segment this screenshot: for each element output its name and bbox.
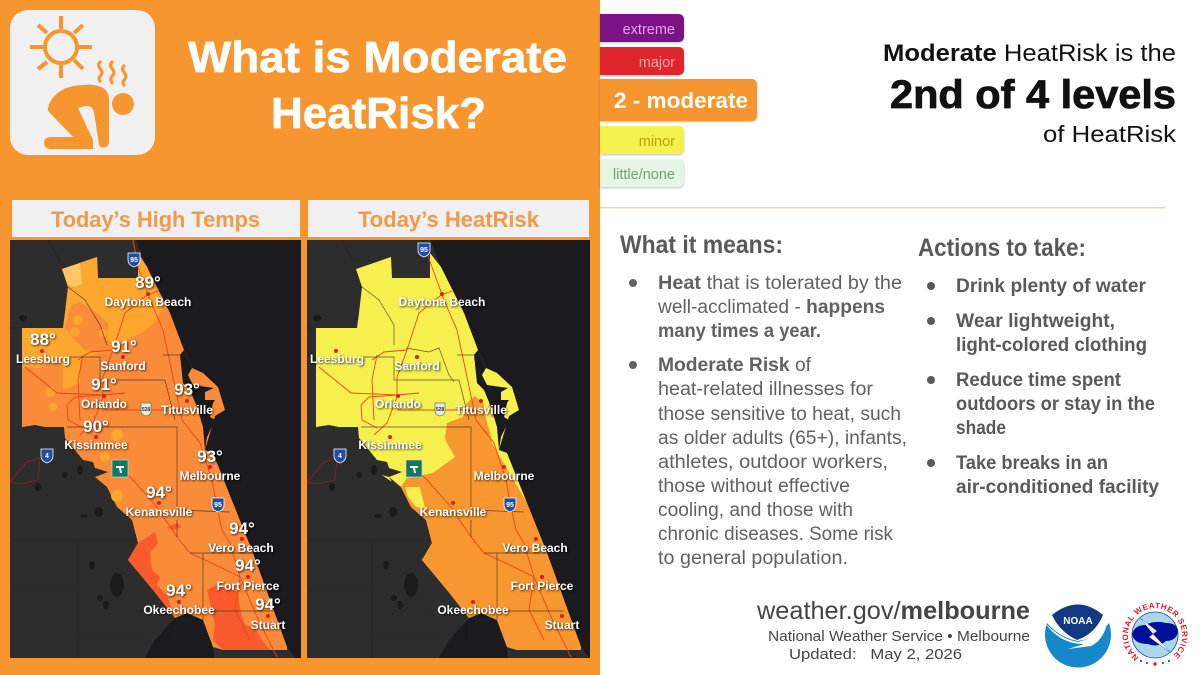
city labels: Titusville bbox=[455, 403, 507, 417]
I-4 shield bbox=[334, 449, 346, 463]
text block: Actions to take: Drink plenty of water bbox=[956, 275, 1146, 297]
level heading: of HeatRisk bbox=[1043, 121, 1177, 147]
title: What is Moderate bbox=[188, 33, 567, 82]
I-95 shield, south: 95 bbox=[506, 502, 514, 509]
level: major: major bbox=[639, 55, 675, 71]
city and temperature labels: 90° bbox=[83, 417, 109, 436]
level heading: Moderate HeatRisk is the bbox=[883, 40, 1176, 67]
city and temperature labels: 94° bbox=[146, 483, 172, 502]
city and temperature labels: 94° bbox=[166, 581, 192, 600]
text block: What it means: heat-related illnesses for bbox=[658, 379, 874, 400]
I-95 shield, north bbox=[418, 243, 430, 257]
city labels: Daytona Beach bbox=[399, 295, 485, 309]
level: little/none bbox=[600, 159, 684, 187]
text block: What it means: Moderate Risk of bbox=[658, 355, 812, 376]
text block: Actions to take: Take breaks in an bbox=[956, 452, 1108, 474]
I-95 shield, north bbox=[128, 253, 140, 267]
I-95 shield, north: 95 bbox=[420, 247, 428, 254]
city and temperature labels: Titusville bbox=[161, 403, 213, 417]
text block: What it means: many times a year. bbox=[658, 321, 821, 342]
text block: Actions to take: Actions to take: bbox=[918, 234, 1086, 262]
level: 2 - moderate: 2 - moderate bbox=[614, 88, 748, 113]
text block: What it means: as older adults (65+), infants, bbox=[658, 428, 907, 449]
city and temperature labels: Daytona Beach bbox=[105, 295, 191, 309]
city and temperature labels: Orlando bbox=[81, 397, 127, 411]
text block: What it means: chronic diseases. Some risk bbox=[658, 524, 893, 545]
text block: Actions to take: Wear lightweight, bbox=[956, 310, 1115, 332]
level: major bbox=[600, 47, 684, 75]
city and temperature labels: 88° bbox=[30, 330, 56, 349]
footer: website and office: Updated: May 2, 2026 bbox=[789, 646, 962, 663]
city and temperature labels: Sanford bbox=[100, 359, 146, 373]
city and temperature labels: Kissimmee bbox=[64, 438, 128, 452]
I-95 shield, north: 95 bbox=[130, 257, 138, 264]
city labels: Okeechobee bbox=[437, 603, 509, 617]
text block: Actions to take: air-conditioned facility bbox=[956, 476, 1159, 498]
level: little/none: little/none bbox=[613, 167, 675, 183]
city labels: Melbourne bbox=[474, 469, 535, 483]
text block: Actions to take bbox=[918, 234, 1159, 498]
text block: What it means bbox=[620, 231, 907, 569]
footer: website and office: weather.gov/melbourne bbox=[756, 597, 1030, 625]
icon: NOAA logo bbox=[1045, 598, 1111, 668]
level: extreme: extreme bbox=[623, 22, 675, 38]
city and temperature labels: 91° bbox=[91, 375, 117, 394]
city labels: Stuart bbox=[545, 618, 579, 632]
city and temperature labels: 93° bbox=[197, 447, 223, 466]
text block: What it means: cooling, and those with bbox=[658, 500, 853, 521]
I-95 shield, south bbox=[504, 498, 516, 512]
text block: What it means: What it means: bbox=[620, 231, 783, 259]
city and temperature labels: 94° bbox=[235, 556, 261, 575]
text block: What it means: those without effective bbox=[658, 476, 850, 497]
I-95 shield, south: 95 bbox=[214, 502, 222, 509]
level: minor bbox=[600, 126, 684, 154]
level heading: 2nd of 4 levels bbox=[890, 73, 1176, 117]
city and temperature labels: 93° bbox=[174, 380, 200, 399]
icon: NOAA logo: NOAA bbox=[1063, 616, 1093, 627]
text block: What it means: athletes, outdoor workers, bbox=[658, 452, 888, 473]
I-4 shield bbox=[41, 449, 53, 463]
text block: Actions to take: light-colored clothing bbox=[956, 334, 1147, 356]
level heading bbox=[883, 40, 1177, 147]
city and temperature labels: 91° bbox=[111, 337, 137, 356]
city and temperature labels: Melbourne bbox=[180, 469, 241, 483]
city labels: Kenansville bbox=[420, 505, 487, 519]
footer: website and office bbox=[756, 597, 1030, 663]
city and temperature labels: 89° bbox=[135, 273, 161, 292]
city labels: Sanford bbox=[394, 359, 440, 373]
text block: What it means: those sensitive to heat, such bbox=[658, 404, 901, 425]
city and temperature labels: Okeechobee bbox=[143, 603, 215, 617]
text block: Actions to take: Reduce time spent bbox=[956, 369, 1121, 391]
city labels: Orlando bbox=[375, 397, 421, 411]
Beachline shield: 528 bbox=[142, 407, 150, 413]
text block: Actions to take: outdoors or stay in the bbox=[956, 393, 1155, 415]
map: HeatRisk levels bbox=[304, 240, 595, 658]
panel heading: Today's High Temps bbox=[12, 200, 300, 237]
city and temperature labels: Kenansville bbox=[126, 505, 193, 519]
icon: person overheating under the sun bbox=[10, 10, 155, 155]
I-4 shield: 4 bbox=[45, 453, 49, 460]
text block: What it means: well-acclimated - happens bbox=[657, 297, 885, 318]
city and temperature labels: Vero Beach bbox=[208, 541, 274, 555]
city and temperature labels: Fort Pierce bbox=[217, 579, 280, 593]
title bbox=[188, 33, 567, 138]
city and temperature labels: Leesburg bbox=[16, 352, 70, 366]
title: HeatRisk? bbox=[271, 89, 486, 138]
map: high temperatures bbox=[10, 240, 301, 658]
text block: What it means: Heat that is tolerated by the bbox=[658, 273, 902, 294]
text block: Actions to take: shade bbox=[956, 417, 1006, 439]
city labels: Kissimmee bbox=[358, 438, 422, 452]
city and temperature labels: 94° bbox=[229, 519, 255, 538]
panel heading: Today's HeatRisk bbox=[308, 200, 589, 237]
city labels: Fort Pierce bbox=[511, 579, 574, 593]
city labels: Leesburg bbox=[310, 352, 364, 366]
I-95 shield, south bbox=[212, 498, 224, 512]
left orange panel bbox=[0, 0, 600, 675]
city and temperature labels: Stuart bbox=[251, 618, 285, 632]
level: minor: minor bbox=[639, 134, 675, 150]
city labels bbox=[310, 295, 579, 632]
Beachline shield: 528 bbox=[436, 407, 444, 413]
I-4 shield: 4 bbox=[338, 453, 342, 460]
HeatRisk level scale bbox=[600, 14, 757, 187]
panel heading: Today's HeatRisk: Today’s HeatRisk bbox=[358, 207, 540, 232]
footer: website and office: National Weather Service • Melbourne bbox=[768, 628, 1030, 645]
Beachline shield bbox=[141, 403, 151, 416]
Beachline shield bbox=[435, 403, 445, 416]
text block: What it means: to general population. bbox=[658, 548, 848, 569]
level: extreme bbox=[600, 14, 684, 42]
panel heading: Today's High Temps: Today’s High Temps bbox=[51, 207, 260, 232]
icon: National Weather Service logo: NATIONAL WEATHER SERVICE bbox=[1122, 602, 1188, 661]
Florida Turnpike sign bbox=[112, 460, 128, 477]
city and temperature labels bbox=[16, 273, 285, 632]
city and temperature labels: 94° bbox=[255, 595, 281, 614]
city labels: Vero Beach bbox=[502, 541, 568, 555]
level: 2 - moderate bbox=[600, 79, 757, 121]
Florida Turnpike sign bbox=[406, 460, 422, 477]
